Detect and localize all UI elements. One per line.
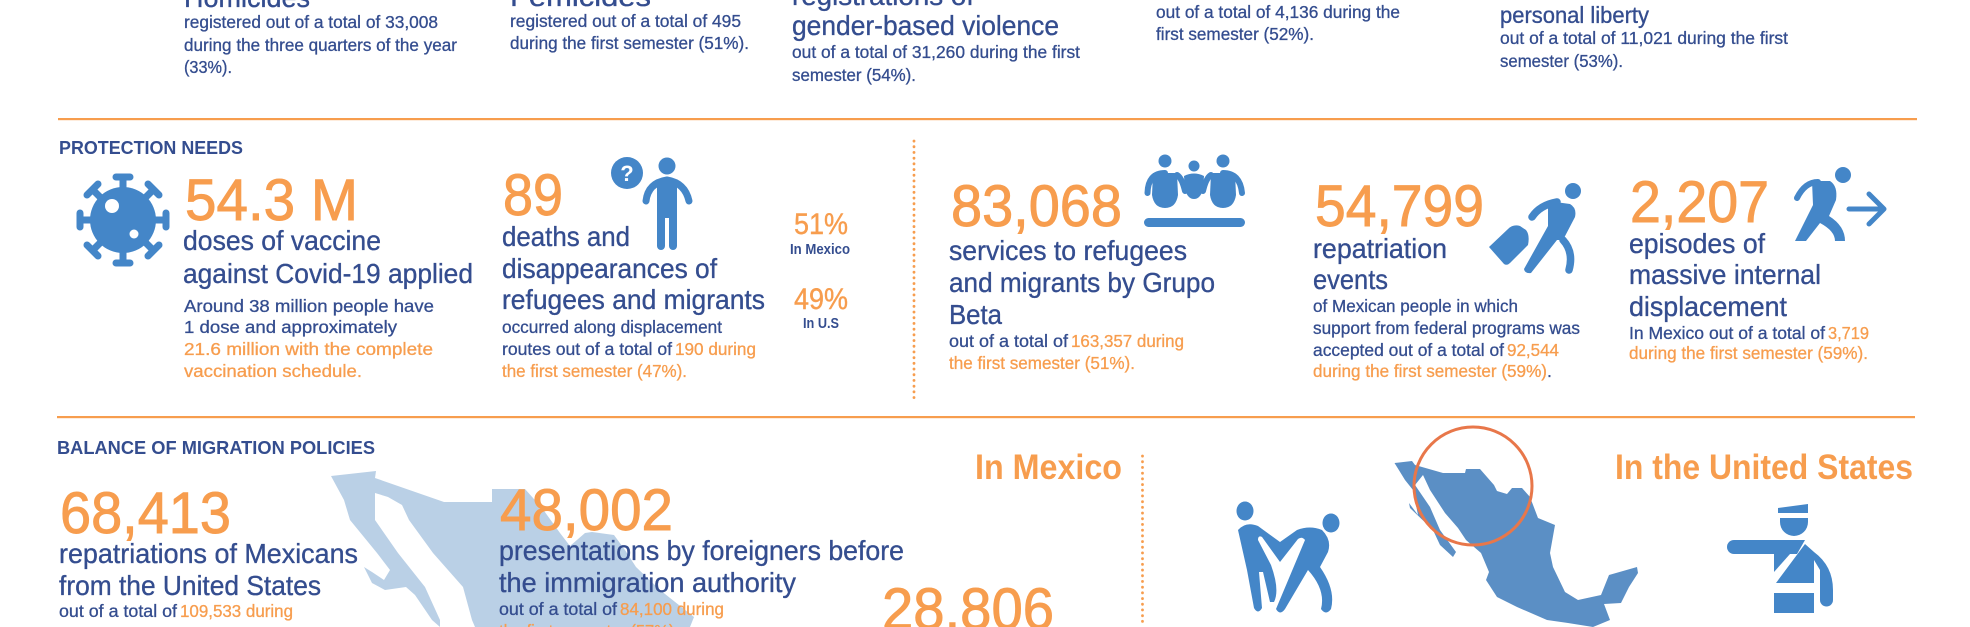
stat: Grupo Beta services: Beta xyxy=(949,299,1002,330)
stat: deaths and disappearances xyxy=(502,163,765,381)
stat: gender-based violence: gender-based violence xyxy=(792,10,1059,41)
stat: out of 4,136: out of a total of 4,136 during the xyxy=(1156,2,1400,22)
stat: Grupo Beta services: out of a total of xyxy=(949,331,1068,351)
stat: share in U.S xyxy=(794,283,848,332)
stat: presentations by foreigners: 48,002 xyxy=(500,478,673,543)
heading: in the United States: In the United States xyxy=(1615,448,1913,487)
stat: gender-based violence: semester (54%). xyxy=(792,65,916,85)
stat: repatriations of Mexicans: out of a total of xyxy=(59,601,177,621)
stat: repatriations of Mexicans xyxy=(59,481,358,621)
stat: femicides xyxy=(510,0,749,53)
stat: repatriation events: events xyxy=(1313,264,1388,295)
heading: balance of migration policies: BALANCE OF MIGRATION POLICIES xyxy=(57,438,375,458)
stat: internal displacement: displacement xyxy=(1629,291,1787,322)
icon: virus xyxy=(80,177,166,263)
stat: Grupo Beta services: 163,357 during xyxy=(1071,331,1184,351)
icon: missing person xyxy=(611,157,689,250)
stat: deaths and disappearances: 190 during xyxy=(675,339,756,359)
stat: repatriation events: repatriation xyxy=(1313,233,1447,264)
stat: internal displacement: 3,719 xyxy=(1828,323,1869,343)
stat: internal displacement: 2,207 xyxy=(1630,170,1769,235)
stat: internal displacement: In Mexico out of a total of xyxy=(1629,323,1825,343)
stat: deaths and disappearances: refugees and migrants xyxy=(502,284,765,315)
stat: vaccine doses: against Covid-19 applied xyxy=(183,258,473,289)
icon: missing person: ? xyxy=(620,161,634,186)
stat: presentations by foreigners: presentations by foreigners before xyxy=(499,535,904,566)
stat: vaccine doses xyxy=(183,168,473,381)
stat: repatriation events: support from federal programs was xyxy=(1313,318,1580,338)
stat: share in U.S: 49% xyxy=(794,283,848,316)
stat: out of 4,136 xyxy=(1156,2,1400,44)
stat: homicides: during the three quarters of the year xyxy=(184,35,457,55)
stat: share in Mexico xyxy=(790,208,850,258)
stat: vaccine doses: doses of vaccine xyxy=(183,225,381,256)
stat: vaccine doses: vaccination schedule. xyxy=(184,361,362,381)
stat: vaccine doses: Around 38 million people have xyxy=(184,296,434,316)
icon: family group xyxy=(1144,154,1245,227)
stat: vaccine doses: 54.3 M xyxy=(185,168,358,233)
map: Mexico with northern border highlight xyxy=(1394,427,1638,627)
stat: personal liberty xyxy=(1500,2,1788,71)
stat: deaths and disappearances: occurred along displacement xyxy=(502,317,722,337)
stat: Grupo Beta services xyxy=(949,174,1215,373)
stat: repatriation events: . xyxy=(1547,361,1552,381)
stat: repatriation events: 54,799 xyxy=(1315,174,1484,239)
stat: repatriation events: 92,544 xyxy=(1507,340,1559,360)
stat: femicides: registered out of a total of 495 xyxy=(510,11,741,31)
stat: repatriations of Mexicans: from the United States xyxy=(59,570,321,601)
stat: presentations by foreigners: out of a total of xyxy=(499,599,617,619)
stat: repatriation events: of Mexican people in which xyxy=(1313,296,1518,316)
stat: repatriations of Mexicans: repatriations of Mexicans xyxy=(59,538,358,569)
stat: internal displacement: episodes of xyxy=(1629,228,1765,259)
stat: presentations by foreigners: 84,100 during xyxy=(620,599,724,619)
icon: border officer xyxy=(1727,504,1833,613)
stat: presentations by foreigners: the immigration authority xyxy=(499,567,796,598)
stat: internal displacement: during the first semester (59%). xyxy=(1629,343,1868,363)
stat: repatriation events: during the first semester (59%) xyxy=(1313,361,1547,381)
stat: internal displacement xyxy=(1629,170,1869,363)
stat: repatriation events: accepted out of a total of xyxy=(1313,340,1504,360)
icon: traveller with luggage xyxy=(1489,183,1581,273)
stat: share in Mexico: In Mexico xyxy=(790,242,850,258)
stat: Grupo Beta services: services to refugees xyxy=(949,235,1187,266)
map: Mexico light background xyxy=(331,471,694,627)
stat: deaths and disappearances: deaths and xyxy=(502,221,630,252)
stat: personal liberty: out of a total of 11,021 during the first xyxy=(1500,28,1788,48)
heading: in Mexico: In Mexico xyxy=(975,448,1122,487)
stat: deaths and disappearances: disappearances of xyxy=(502,253,717,284)
heading: protection needs: PROTECTION NEEDS xyxy=(59,138,243,158)
icon: couple xyxy=(1236,502,1340,612)
stat: femicides: during the first semester (51%). xyxy=(510,33,749,53)
stat: presentations by foreigners xyxy=(499,478,904,627)
stat: Grupo Beta services: the first semester (51%). xyxy=(949,353,1135,373)
stat: share in Mexico: 51% xyxy=(794,208,848,241)
stat: deaths and disappearances: routes out of a total of xyxy=(502,339,672,359)
stat: repatriations of Mexicans: 68,413 xyxy=(60,481,231,546)
stat: deaths and disappearances: the first semester (47%). xyxy=(502,361,687,381)
stat: personal liberty: personal liberty xyxy=(1500,2,1649,28)
stat: homicides: (33%). xyxy=(184,57,232,77)
stat: out of 4,136: first semester (52%). xyxy=(1156,24,1314,44)
stat: share in U.S: In U.S xyxy=(803,316,839,332)
stat: Grupo Beta services: 83,068 xyxy=(951,174,1122,239)
stat: vaccine doses: 1 dose and approximately xyxy=(184,317,397,337)
stat: vaccine doses: 21.6 million with the complete xyxy=(184,339,433,359)
stat: homicides xyxy=(184,0,457,77)
stat: gender-based violence: out of a total of 31,260 during the first xyxy=(792,42,1080,62)
stat: personal liberty: semester (53%). xyxy=(1500,51,1623,71)
stat: deaths and disappearances: 89 xyxy=(503,163,563,228)
stat: Grupo Beta services: and migrants by Grupo xyxy=(949,267,1215,298)
stat: homicides: registered out of a total of 33,008 xyxy=(184,12,438,32)
stat: repatriations of Mexicans: 109,533 during xyxy=(180,601,293,621)
stat: repatriation events xyxy=(1313,174,1580,381)
icon: running person with arrow xyxy=(1795,167,1884,241)
stat: internal displacement: massive internal xyxy=(1629,259,1821,290)
stat: gender-based violence xyxy=(792,0,1080,85)
